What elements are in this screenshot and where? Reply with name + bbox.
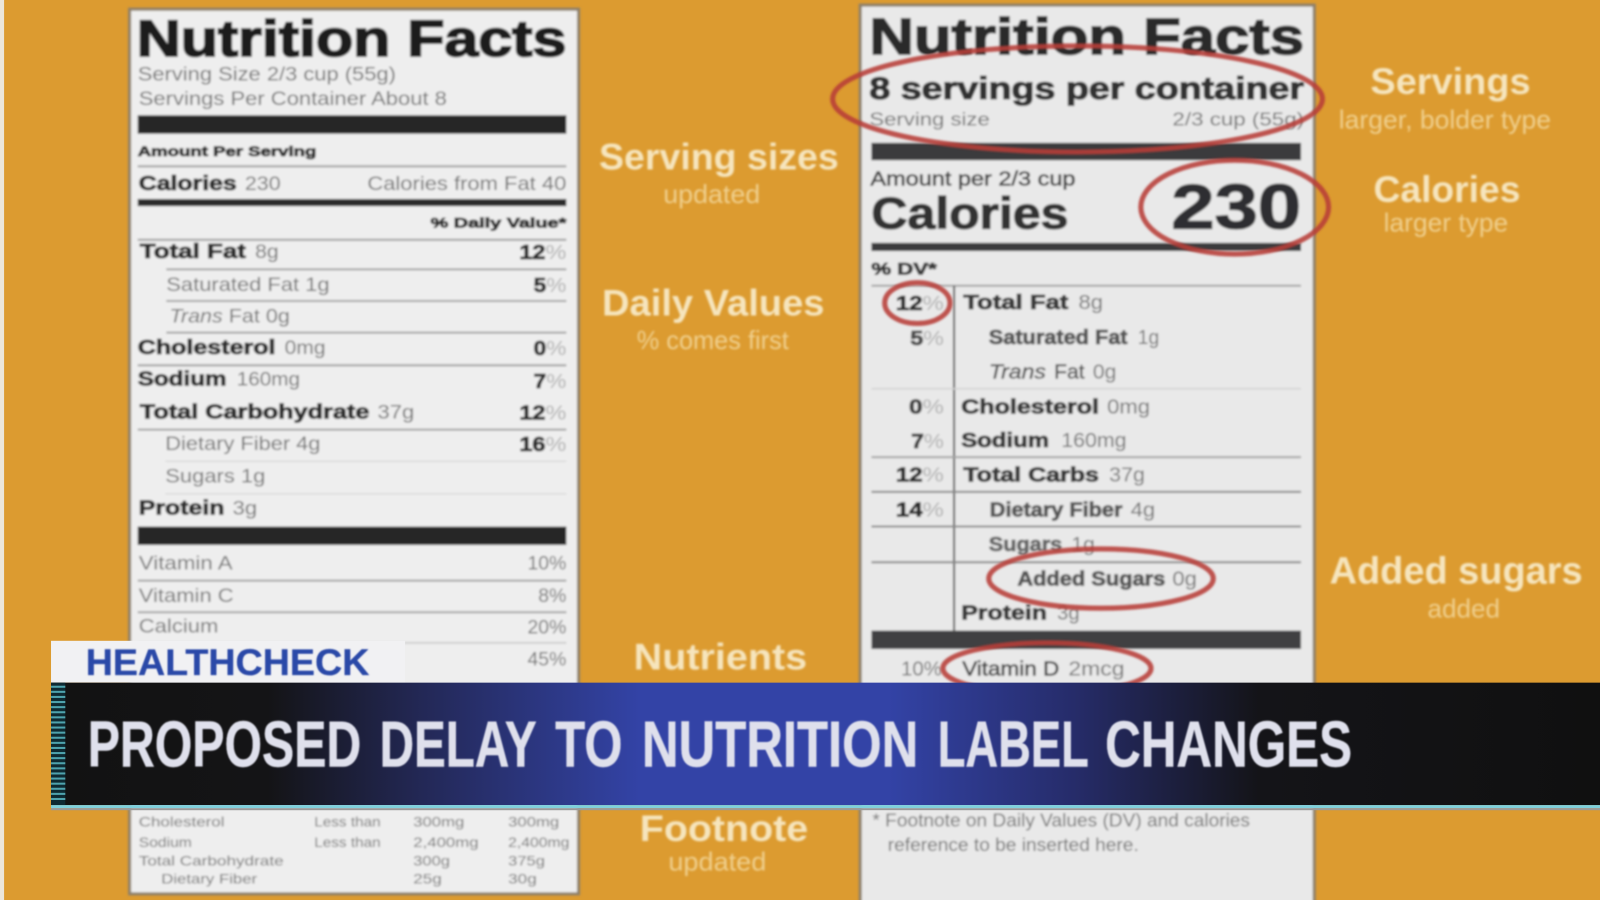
serving information (138, 64, 447, 110)
nutrient rows: Sugars 1g (165, 466, 265, 488)
serving information: Servings Per Container About 8 (139, 88, 447, 110)
callout: serving sizes: updated (663, 181, 760, 209)
callout: servings (1339, 61, 1551, 135)
nutrient rows: 0g (1093, 362, 1116, 384)
nutrient rows: Sodium (138, 369, 227, 391)
callout: serving sizes (599, 136, 839, 209)
nutrient rows: Saturated Fat 1g (166, 274, 330, 296)
panel: proposed nutrition label (860, 5, 1314, 900)
nutrient rows: 0% (909, 396, 944, 418)
servings text: 2/3 cup (55g) (1172, 109, 1304, 130)
vitamin D row: Vitamin D (962, 659, 1059, 681)
callout: servings: larger, bolder type (1339, 107, 1551, 135)
footnote table: 300mg (508, 815, 559, 831)
nutrient rows: Cholesterol (138, 337, 276, 359)
vitamin rows: Vitamin A (139, 552, 233, 574)
vitamin rows: 45% (528, 648, 566, 670)
callout: footnote: Footnote (640, 808, 808, 849)
vitamin D row (901, 659, 1124, 681)
nutrient rows: 12% (519, 402, 566, 424)
calories block: 230 (1171, 173, 1301, 243)
nutrient rows: 5% (534, 275, 566, 297)
banner bar (51, 683, 1600, 805)
callout: serving sizes: Serving sizes (599, 136, 839, 177)
nutrient rows: 37g (378, 401, 414, 423)
banner left stripes (51, 683, 65, 805)
nutrient rows: 160mg (1061, 430, 1127, 452)
headline: PROPOSED (88, 707, 361, 780)
nutrient rows: 4g (1131, 499, 1155, 521)
nutrient rows: Protein (139, 497, 224, 519)
callout: nutrients: Nutrients (634, 636, 807, 677)
nutrient rows: Dietary Fiber 4g (165, 433, 320, 455)
nutrient rows: 14% (896, 499, 944, 521)
footnote text (872, 810, 1250, 855)
footnote table: 30g (508, 872, 537, 888)
highlight: added sugars (989, 549, 1213, 608)
footnote table: Sodium (139, 835, 192, 851)
heading: Nutrition Facts (proposed): Nutrition Facts (869, 8, 1304, 65)
callout: daily values: Daily Values (602, 282, 824, 323)
footnote table: Less than (314, 815, 381, 831)
footnote table: Less than (314, 835, 381, 851)
nutrient rows: Added Sugars (1017, 569, 1165, 591)
callout: added sugars: added (1428, 595, 1500, 623)
nutrient rows: 0mg (285, 337, 326, 359)
servings text: Serving size (869, 109, 990, 130)
nutrient rows: 12% (519, 242, 566, 264)
headline: NUTRITION (642, 707, 918, 780)
nutrient rows: Cholesterol (961, 396, 1099, 418)
calories block: Amount per 2/3 cup (870, 169, 1076, 191)
vitamin rows: 10% (528, 552, 566, 574)
calories block: Calories (871, 188, 1068, 239)
footnote table: Cholesterol (139, 815, 224, 831)
nutrient rows: Fat (1054, 362, 1085, 384)
nutrient rows: 0% (534, 338, 566, 360)
vitamin rows: 8% (538, 585, 566, 607)
nutrient rows: 37g (1109, 465, 1145, 487)
headline: TO (555, 707, 622, 780)
panel: current nutrition label: % Daily Value* (431, 216, 567, 232)
vitamin D row: 10% (901, 659, 942, 681)
callout: footnote (640, 808, 808, 876)
footnote table (139, 815, 569, 888)
nutrient rows: Total Fat (140, 241, 246, 263)
callout: daily values (602, 282, 824, 355)
nutrient rows (871, 292, 1301, 624)
footnote table: 300g (413, 853, 450, 869)
headline: LABEL (938, 707, 1089, 780)
callouts: right column (1330, 61, 1583, 623)
highlight: daily value (885, 283, 950, 323)
nutrient rows: 5% (910, 328, 944, 350)
servings text: 8 servings per container (869, 70, 1304, 106)
callouts: middle column (599, 136, 839, 876)
nutrient rows: Dietary Fiber (990, 499, 1123, 521)
footnote table: 300mg (413, 815, 464, 831)
calories row: 230 (245, 173, 281, 195)
footnote table: 2,400mg (508, 835, 569, 851)
nutrient rows: 7% (911, 431, 944, 453)
footnote table: Dietary Fiber (161, 872, 257, 888)
callout: calories (1373, 169, 1520, 238)
nutrient rows: Trans (989, 362, 1046, 384)
callout: servings: Servings (1370, 61, 1531, 102)
servings text (869, 70, 1304, 130)
nutrient rows: 12% (896, 465, 944, 487)
nutrient rows: 8g (1079, 292, 1103, 314)
callout: added sugars (1330, 550, 1583, 623)
footnote text: reference to be inserted here. (888, 834, 1139, 855)
nutrient rows: 3g (1057, 602, 1080, 624)
nutrient rows: 3g (233, 497, 257, 519)
calories row (139, 173, 567, 195)
nutrient rows: Protein (961, 602, 1047, 624)
vitamin rows: Calcium (139, 616, 218, 638)
nutrient rows: Total Fat (963, 292, 1069, 314)
nutrient rows (138, 241, 566, 519)
nutrient rows: Sodium (961, 430, 1049, 452)
panel: current nutrition label: Amount Per Serving (138, 144, 316, 160)
vitamin rows: 20% (528, 617, 566, 639)
vitamin rows: Vitamin C (139, 585, 234, 607)
panel: current nutrition label (130, 9, 579, 894)
nutrient rows: Sugars (989, 534, 1062, 556)
footnote table: 25g (413, 872, 442, 888)
tab: Healthcheck: HEALTHCHECK (86, 642, 370, 683)
nutrient rows: 160mg (237, 369, 300, 391)
nutrient rows: 1g (1138, 327, 1159, 349)
vitamin rows (138, 552, 566, 670)
highlight: servings (833, 46, 1322, 152)
nutrient rows: 16% (519, 434, 566, 456)
nutrient rows: 7% (534, 371, 566, 393)
serving information: Serving Size 2/3 cup (55g) (138, 64, 396, 86)
heading: Nutrition Facts (current): Nutrition Facts (137, 10, 566, 67)
calories block (870, 169, 1301, 243)
footnote table: 2,400mg (413, 835, 479, 851)
nutrient rows: Saturated Fat (989, 327, 1128, 349)
vitamin D row: 2mcg (1068, 659, 1124, 681)
nutrient rows: Total Carbohydrate (140, 401, 369, 423)
callout: daily values: % comes first (637, 327, 789, 355)
footnote text: * Footnote on Daily Values (DV) and calories (872, 810, 1250, 831)
calories row: Calories from Fat 40 (367, 173, 567, 195)
headline: CHANGES (1105, 707, 1352, 780)
callout: calories: larger type (1384, 210, 1508, 238)
callout: footnote: updated (668, 848, 766, 876)
nutrient rows: Trans Fat 0g (169, 305, 290, 327)
callout: added sugars: Added sugars (1330, 550, 1583, 592)
footnote table: Total Carbohydrate (139, 853, 284, 869)
headline: DELAY (380, 707, 537, 780)
footnote table: 375g (508, 853, 545, 869)
banner bottom rule (51, 805, 1600, 808)
nutrient rows: 8g (255, 241, 279, 263)
nutrient rows: 1g (1071, 534, 1095, 556)
red circled highlights (833, 46, 1329, 694)
nutrient rows: 12% (896, 293, 944, 315)
nutrient rows: 0mg (1107, 396, 1150, 418)
callout: calories: Calories (1373, 169, 1520, 210)
panel: proposed nutrition label: % DV* (871, 260, 938, 278)
nutrient rows: Total Carbs (963, 465, 1099, 487)
news lower third (51, 641, 1600, 810)
highlight: vitamin D (943, 643, 1151, 694)
calories row: Calories (139, 173, 237, 195)
nutrient rows: 0g (1172, 569, 1197, 591)
highlight: calories (1141, 160, 1329, 254)
